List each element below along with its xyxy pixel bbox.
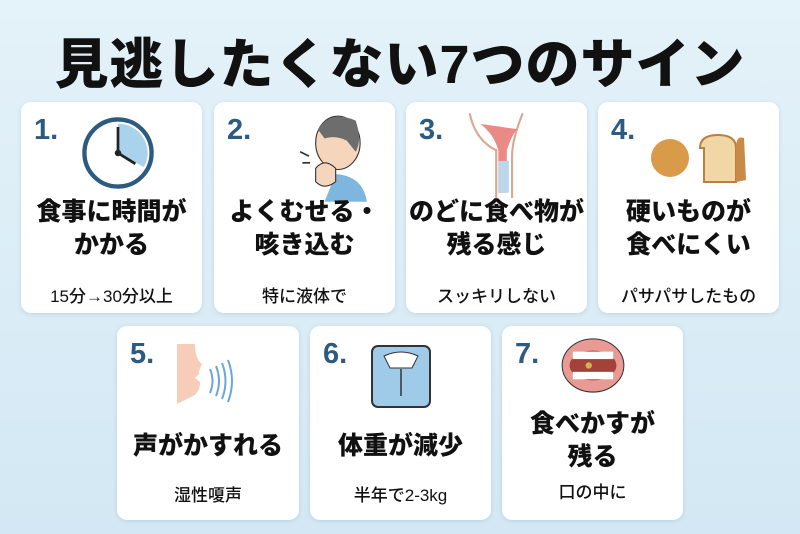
panel: 3: 3. [419, 114, 443, 146]
panel: 6 [310, 326, 491, 520]
panel: 3 [406, 102, 587, 313]
panel: 3: スッキリしない [437, 287, 556, 306]
panel: 3: 残る感じ [446, 231, 546, 259]
panel: 4: 食べにくい [626, 231, 751, 259]
panel: 2: 2. [227, 114, 251, 146]
panel: 4: 4. [611, 114, 635, 146]
panel: 5: 湿性嗄声 [174, 486, 242, 505]
panel: 5 [117, 326, 299, 520]
panel: 1: 15分→30分以上 [50, 287, 173, 306]
panel: 1: 食事に時間が [36, 198, 186, 226]
title: 見逃したくない7つのサイン [54, 35, 746, 95]
panel: 3: のどに食べ物が [409, 198, 584, 226]
panel: 2: 特に液体で [262, 287, 347, 306]
panel: 5: 声がかすれる [133, 432, 283, 460]
panel: 1: かかる [74, 231, 149, 259]
icon: throat [468, 112, 524, 198]
panel: 5: 5. [130, 338, 154, 370]
panel: 4: パサパサしたもの [621, 287, 756, 306]
icon: clock [82, 117, 154, 189]
panel: 2: 咳き込む [254, 231, 354, 259]
panel: 6: 体重が減少 [338, 432, 463, 460]
icon: speaking face [177, 344, 233, 404]
panel: 7: 7. [515, 338, 539, 370]
panel: 4 [598, 102, 779, 313]
panel: 7 [502, 326, 683, 520]
icon: scale [371, 345, 431, 408]
panel: 1 [21, 102, 202, 313]
panel: 7: 口の中に [558, 483, 626, 502]
icon: cracker and bread [651, 134, 746, 183]
panel: 7: 食べかすが [530, 410, 655, 438]
panel: 2: よくむせる・ [229, 198, 380, 226]
panel: 2 [214, 102, 395, 313]
icon: coughing man [300, 116, 367, 202]
panel: 4: 硬いものが [626, 198, 751, 226]
icon: mouth [562, 338, 624, 393]
panel: 7: 残る [567, 443, 618, 471]
panel: 6: 半年で2-3kg [354, 486, 447, 505]
panel: 6: 6. [323, 338, 347, 370]
panel: 1: 1. [34, 114, 58, 146]
